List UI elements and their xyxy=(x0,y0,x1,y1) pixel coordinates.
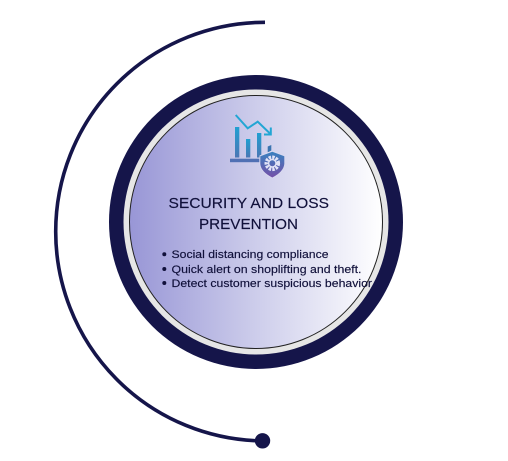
bullet list xyxy=(162,249,372,290)
heading: SECURITY AND LOSS xyxy=(168,195,329,212)
bullet list: Detect customer suspicious behavior xyxy=(172,278,372,290)
heading: PREVENTION xyxy=(199,216,298,233)
bullet list: Social distancing compliance xyxy=(172,249,328,261)
outer arc with end dot xyxy=(56,22,270,448)
icon: declining chart with security shield xyxy=(230,115,286,178)
heading xyxy=(168,195,329,233)
central disc xyxy=(109,75,403,369)
bullet list: Quick alert on shoplifting and theft. xyxy=(172,264,362,276)
